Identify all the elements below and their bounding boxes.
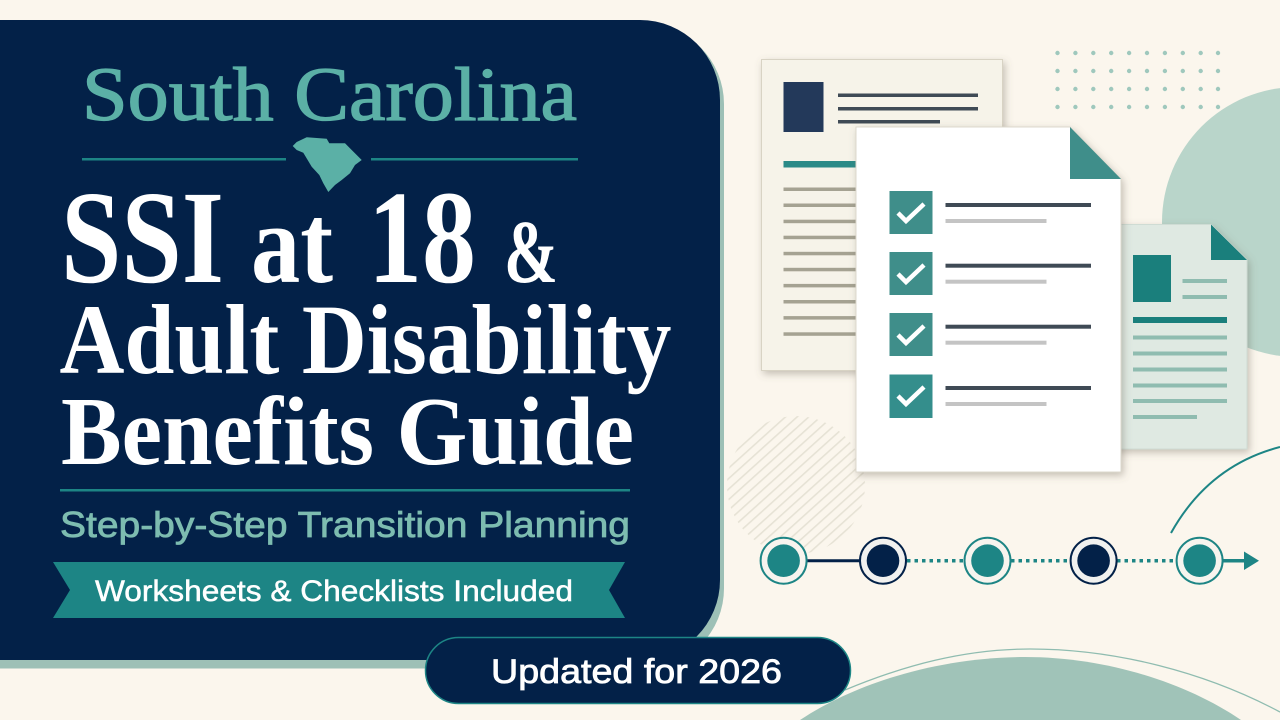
updated pill bbox=[426, 638, 850, 704]
icon: South Carolina map bbox=[293, 137, 362, 192]
timeline arrow bbox=[1223, 552, 1259, 570]
decorative large circle bbox=[1162, 87, 1280, 357]
main title bbox=[60, 163, 672, 485]
step 3 bbox=[964, 538, 1010, 584]
hatched circle bbox=[727, 416, 865, 554]
left divider bbox=[82, 158, 286, 160]
step 4 bbox=[1071, 538, 1117, 584]
ribbon text: Worksheets & Checklists Included bbox=[95, 575, 573, 608]
document: checklist bbox=[856, 127, 1121, 472]
main title: Benefits Guide bbox=[61, 378, 634, 485]
timeline bbox=[761, 538, 1259, 584]
checklist item 4 bbox=[890, 374, 1091, 418]
subtitle: Step-by-Step Transition Planning bbox=[60, 504, 630, 545]
dot grid bbox=[1055, 51, 1220, 109]
page fold bbox=[1070, 127, 1121, 179]
main title: Adult Disability bbox=[60, 284, 672, 395]
main title: & bbox=[504, 203, 558, 302]
step 5 bbox=[1177, 538, 1223, 584]
state name: South Carolina bbox=[82, 53, 577, 137]
bottom mound bbox=[800, 657, 1241, 720]
panel shadow bbox=[0, 24, 724, 668]
checklist item 2 bbox=[890, 252, 1091, 295]
pill text: Updated for 2026 bbox=[491, 653, 782, 691]
checklist item 3 bbox=[890, 313, 1091, 356]
right divider bbox=[371, 158, 578, 160]
document: back left bbox=[762, 60, 1002, 370]
navy title panel bbox=[0, 20, 720, 660]
bottom thin arc bbox=[845, 649, 1280, 712]
main title: 18 bbox=[368, 163, 476, 311]
checklist item 1 bbox=[890, 191, 1091, 234]
main title: SSI bbox=[61, 163, 224, 311]
step 2 bbox=[860, 538, 906, 584]
corner arc bbox=[1171, 447, 1280, 533]
step 1 bbox=[761, 538, 807, 584]
ribbon banner bbox=[53, 562, 625, 618]
document: back right bbox=[1100, 224, 1247, 449]
main title: at bbox=[251, 182, 333, 307]
title rule bbox=[60, 489, 630, 492]
